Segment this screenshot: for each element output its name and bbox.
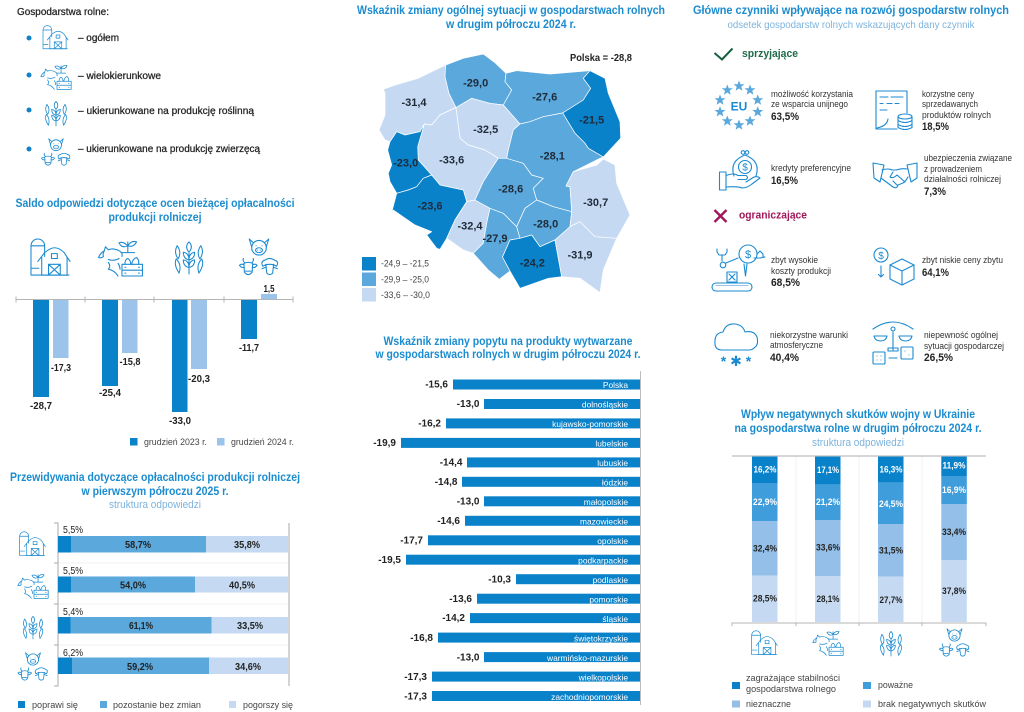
horizontal bars by voivodeship: -13,0: [457, 652, 480, 664]
horizontal bars by voivodeship: -19,5: [378, 555, 401, 566]
icon: scales and dice: [873, 322, 913, 364]
forecast legend: pozostanie bez zmian: [113, 700, 201, 710]
stacked bar chart: 61,1%: [129, 621, 153, 632]
heading: current profitability: produkcji rolniczej: [108, 210, 202, 224]
bar chart: -17,3: [51, 363, 71, 374]
panel: map of Poland: [357, 3, 665, 302]
factor: weather: [770, 330, 848, 364]
horizontal bars by voivodeship: -13,0: [457, 496, 480, 508]
map region values: -23,0: [393, 157, 418, 169]
bar chart: [16, 284, 293, 427]
stacked column chart: 17,1%: [817, 465, 839, 476]
stacked bar chart: 5,5%: [63, 525, 83, 536]
war effects legend: [732, 673, 986, 709]
factor: uncertainty: 26,5%: [924, 352, 953, 364]
icons: farm types row: [752, 629, 969, 656]
horizontal bars by voivodeship: śląskie: [602, 614, 628, 624]
legend: farm types: – wielokierunkowe: [78, 71, 161, 82]
horizontal bars by voivodeship: podkarpackie: [578, 556, 628, 566]
horizontal bars by voivodeship: lubuskie: [597, 458, 628, 468]
horizontal bars by voivodeship: warmińsko-mazurskie: [546, 653, 628, 663]
war effects legend: gospodarstwa rolnego: [746, 684, 836, 694]
heading: war effects: [734, 407, 982, 449]
icon: EU stars: EU: [731, 100, 747, 114]
legend: farm types: [17, 7, 260, 165]
war effects legend: zagrażające stabilności: [746, 673, 840, 683]
factor: EU support: 63,5%: [771, 111, 799, 123]
map region values: -31,4: [401, 97, 427, 109]
map legend: -33,6 – -30,0: [381, 290, 430, 300]
factor: good prices: [922, 89, 991, 133]
factor: weather: atmosferyczne: [770, 340, 823, 350]
factor: high production cost: koszty produkcji: [771, 266, 831, 276]
factor: good prices: produktów rolnych: [922, 110, 991, 120]
stacked column chart: 32,4%: [753, 544, 777, 554]
heading: war effects: na gospodarstwa rolne w drugim półroczu 2024 r.: [734, 421, 982, 435]
horizontal bars by voivodeship: -13,0: [457, 399, 480, 410]
legend: farm types: – ukierunkowane na produkcję roślinną: [78, 106, 254, 117]
bar chart: -33,0: [169, 416, 191, 427]
horizontal bars by voivodeship: -15,6: [425, 380, 448, 390]
map legend: -29,9 – -25,0: [381, 274, 429, 284]
factor: weather: 40,4%: [770, 352, 799, 364]
map region values: -33,6: [439, 155, 464, 167]
factor: EU support: możliwość korzystania: [771, 89, 853, 99]
map region values: -28,0: [533, 219, 558, 231]
stacked column chart: 11,9%: [942, 460, 966, 472]
icon: invoice and coins: [876, 91, 912, 130]
map region values: -23,6: [417, 200, 443, 212]
horizontal bars by voivodeship: wielkopolskie: [578, 672, 628, 682]
icon: cloud and snow: * ✱ *: [721, 353, 752, 369]
factor: good prices: sprzedawanych: [922, 99, 978, 109]
icon: coin and box: [874, 248, 914, 285]
factor: insurance: 7,3%: [924, 186, 946, 198]
stacked bar chart: 6,2%: [63, 648, 83, 659]
icon: cross mark: [714, 210, 726, 222]
war effects legend: poważne: [878, 680, 913, 690]
horizontal bars by voivodeship: łódzkie: [602, 478, 628, 488]
heading: forecast: [10, 470, 300, 511]
horizontal bars by voivodeship: pomorskie: [589, 594, 628, 604]
map legend: -24,9 – -21,5: [381, 258, 429, 268]
map region values: -32,5: [473, 124, 498, 136]
map region values: -24,2: [520, 257, 545, 269]
horizontal bars by voivodeship: -14,6: [437, 516, 460, 527]
bar chart: -11,7: [239, 343, 259, 354]
chart legend: [130, 437, 294, 447]
horizontal bars by voivodeship: Polska: [603, 380, 628, 390]
stacked column chart: 16,3%: [880, 464, 903, 476]
map region values: -29,0: [463, 77, 488, 89]
panel: effects of the war in Ukraine: [732, 407, 986, 709]
factor: good prices: 18,5%: [922, 121, 949, 133]
horizontal bars by voivodeship: opolskie: [597, 536, 628, 546]
factor: insurance: z prowadzeniem: [924, 164, 982, 174]
factor: low prices: 64,1%: [922, 267, 949, 279]
stacked column chart: 28,1%: [816, 594, 840, 605]
war effects legend: nieznaczne: [746, 699, 791, 709]
icon: purse on a hand: [720, 151, 760, 190]
horizontal bars by voivodeship: -19,9: [373, 438, 396, 449]
factor: insurance: ubezpieczenia związane: [924, 153, 1012, 163]
forecast legend: poprawi się: [32, 700, 78, 710]
stacked bar chart: 34,6%: [235, 662, 261, 673]
heading: map: Wskaźnik zmiany ogólnej sytuacji w gospodarstwach rolnych: [357, 3, 665, 17]
horizontal bars by voivodeship: mazowieckie: [580, 516, 628, 526]
stacked bar chart: 35,8%: [234, 540, 260, 551]
forecast legend: [18, 700, 293, 710]
bar chart: 1,5: [264, 284, 275, 295]
map region values: -21,5: [579, 115, 604, 127]
icons: farm types column: [18, 532, 48, 680]
factor: uncertainty: sytuacji gospodarczej: [924, 341, 1004, 351]
icon: check mark: [714, 48, 732, 60]
legend: farm types: – ukierunkowane na produkcję zwierzęcą: [78, 144, 260, 155]
stacked bar chart: 59,2%: [127, 662, 153, 673]
heading: current profitability: Saldo odpowiedzi dotyczące ocen bieżącej opłacalności: [16, 196, 294, 210]
stacked bar chart: 33,5%: [237, 621, 263, 632]
bar chart: -28,7: [30, 401, 52, 412]
stacked column chart: 28,5%: [753, 594, 777, 604]
legend: farm types: – ogółem: [78, 33, 119, 44]
heading: forecast: w pierwszym półroczu 2025 r.: [81, 484, 229, 498]
horizontal bars by voivodeship: -17,3: [404, 692, 427, 702]
panel: profitability forecast stacked bars: [10, 470, 300, 710]
icon: production line with cost: $: [745, 249, 751, 261]
stacked column chart: 33,4%: [942, 527, 966, 538]
stacked bar chart: 54,0%: [120, 580, 146, 592]
factor: high production cost: 68,5%: [771, 277, 800, 289]
stacked bar chart: [54, 523, 289, 686]
horizontal bars by voivodeship: -13,6: [449, 594, 472, 605]
factor: good prices: korzystne ceny: [922, 89, 974, 99]
stacked column chart: 16,2%: [754, 464, 777, 476]
heading: factors: odsetek gospodarstw rolnych wskazujących dany czynnik: [728, 20, 975, 31]
map region values: -30,7: [583, 197, 608, 209]
war effects legend: brak negatywnych skutków: [878, 699, 986, 709]
stacked column chart: 27,7%: [880, 595, 903, 606]
panel: main development factors: [693, 3, 1012, 369]
heading: demand: [375, 334, 640, 361]
subheading: favourable: sprzyjające: [742, 48, 798, 60]
stacked bar chart: 5,5%: [63, 566, 83, 577]
factor: insurance: [924, 153, 1012, 198]
map region values: -31,9: [567, 250, 593, 262]
map region values: -28,1: [540, 151, 565, 163]
heading: demand: w gospodarstwach rolnych w drugim półroczu 2024 r.: [375, 347, 640, 361]
heading: factors: [693, 3, 1009, 31]
icons: farm types: [31, 239, 278, 276]
map region values: [393, 77, 608, 269]
horizontal bars by voivodeship: -16,2: [418, 418, 441, 430]
factor: EU support: [771, 89, 853, 123]
horizontal bars by voivodeship: zachodniopomorskie: [551, 692, 628, 702]
stacked column chart: 37,8%: [942, 586, 966, 597]
factor: uncertainty: niepewność ogólnej: [924, 330, 998, 340]
horizontal bars by voivodeship: -17,3: [404, 672, 427, 683]
factor: uncertainty: [924, 330, 1004, 364]
icon: handshake: [873, 163, 917, 188]
map region values: -27,6: [532, 91, 557, 103]
map legend: [362, 257, 430, 302]
horizontal bars by voivodeship: -16,8: [410, 633, 433, 644]
stacked bar chart: 58,7%: [125, 540, 151, 551]
horizontal bars by voivodeship: [373, 371, 640, 705]
choropleth map: [379, 54, 630, 293]
horizontal bars by voivodeship: lubelskie: [595, 438, 628, 448]
stacked bar chart: 40,5%: [229, 580, 255, 592]
horizontal bars by voivodeship: podlaskie: [593, 575, 628, 585]
heading: war effects: Wpływ negatywnych skutków wojny w Ukrainie: [741, 407, 975, 421]
horizontal bars by voivodeship: małopolskie: [584, 497, 628, 507]
factor: high production cost: zbyt wysokie: [771, 255, 818, 265]
factor: preferential loans: [771, 163, 851, 187]
factor: insurance: działalności rolniczej: [924, 174, 1001, 184]
stacked column chart: [732, 456, 986, 626]
stacked column chart: 24,5%: [879, 499, 903, 510]
stacked column chart: 33,6%: [816, 542, 840, 554]
map region values: -28,6: [498, 184, 523, 196]
factor: preferential loans: 16,5%: [771, 175, 798, 187]
subheading: limiting: ograniczające: [739, 210, 807, 222]
icon: production line with cost: [712, 245, 765, 291]
forecast legend: pogorszy się: [243, 700, 293, 710]
chart legend: grudzień 2024 r.: [231, 437, 294, 447]
bar chart: -15,8: [120, 357, 141, 368]
factor: EU support: ze wsparcia unijnego: [771, 99, 848, 109]
horizontal bars by voivodeship: -14,4: [440, 458, 463, 468]
icon: cloud and snow: [715, 324, 758, 369]
stacked column chart: 31,5%: [879, 546, 903, 556]
factor: preferential loans: kredyty preferencyjne: [771, 163, 851, 173]
chart legend: grudzień 2023 r.: [144, 437, 207, 447]
legend: farm types: Gospodarstwa rolne:: [17, 7, 109, 18]
stacked bar chart: 5,4%: [63, 607, 83, 618]
stacked column chart: 16,9%: [942, 485, 966, 496]
panel: current profitability bar chart: [16, 196, 294, 447]
factor: low prices: zbyt niskie ceny zbytu: [922, 255, 1003, 265]
heading: map: [357, 3, 665, 31]
heading: forecast: Przewidywania dotyczące opłacalności produkcji rolniczej: [10, 470, 300, 484]
map region values: -32,4: [457, 220, 483, 232]
icon: coin and box: $: [878, 251, 884, 262]
bar chart: -20,3: [188, 374, 210, 385]
stacked column chart: 21,2%: [816, 497, 840, 508]
heading: current profitability: [16, 196, 294, 224]
horizontal bars by voivodeship: -14,2: [442, 613, 465, 624]
icon: EU stars: [714, 80, 763, 130]
factor: low prices: [922, 255, 1003, 279]
callout: Poland value: Polska = -28,8: [570, 53, 632, 64]
heading: demand: Wskaźnik zmiany popytu na produkty wytwarzane: [384, 334, 633, 348]
horizontal bars by voivodeship: -10,3: [488, 574, 511, 586]
horizontal bars by voivodeship: -14,8: [435, 477, 458, 488]
horizontal bars by voivodeship: dolnośląskie: [582, 400, 628, 410]
heading: war effects: struktura odpowiedzi: [812, 437, 904, 449]
heading: map: w drugim półroczu 2024 r.: [445, 17, 576, 31]
stacked column chart: 22,9%: [753, 497, 777, 508]
panel: demand change bar chart: [373, 334, 640, 705]
factor: weather: niekorzystne warunki: [770, 330, 848, 340]
horizontal bars by voivodeship: -17,7: [400, 536, 423, 546]
horizontal bars by voivodeship: świętokrzyskie: [574, 634, 628, 644]
icon: purse on a hand: $: [742, 162, 748, 174]
map region values: -27,9: [482, 233, 508, 245]
horizontal bars by voivodeship: kujawsko-pomorskie: [552, 419, 628, 429]
bar chart: -25,4: [99, 388, 121, 399]
heading: forecast: struktura odpowiedzi: [109, 499, 201, 511]
factor: high production cost: [771, 255, 831, 289]
